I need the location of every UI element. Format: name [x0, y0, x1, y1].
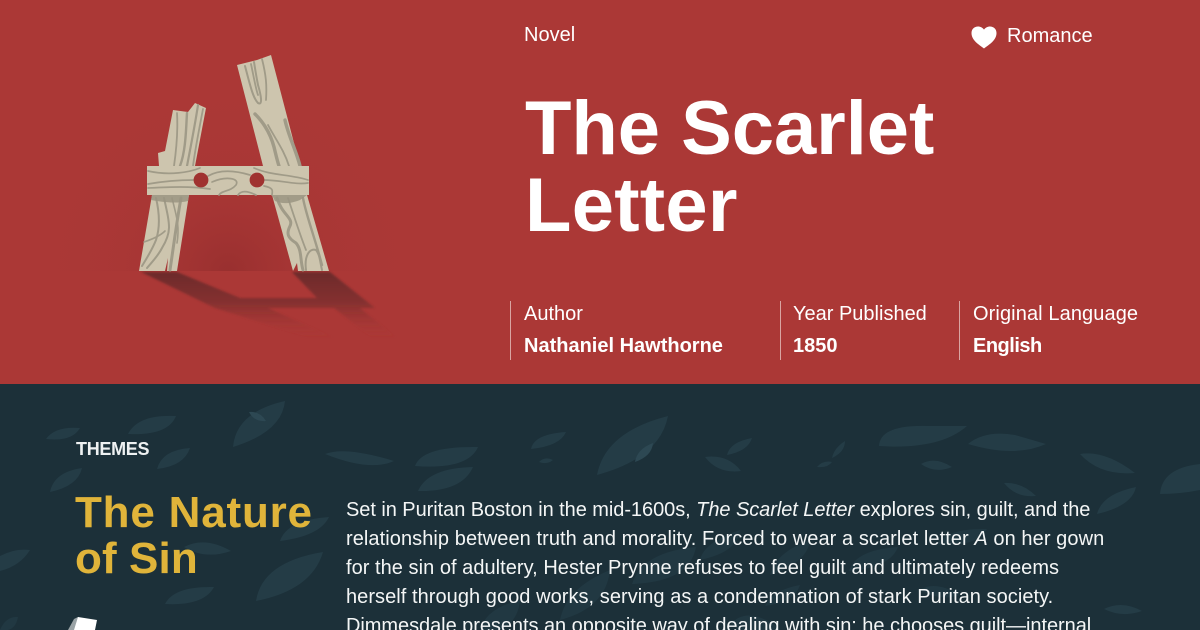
- body text: relationship between truth and morality. Forced to wear a scarlet letter A on her gown: [346, 528, 1104, 550]
- icon: partially visible white shape: [68, 617, 97, 630]
- title: Letter: [525, 163, 738, 248]
- illustration: wooden pillory shaped like the letter A: [139, 55, 374, 322]
- heading: The Nature of Sin: [75, 488, 313, 583]
- label: genre: Novel: [524, 24, 575, 46]
- meta: year published: Year Published: [793, 303, 927, 325]
- panel: header: [0, 0, 1200, 384]
- meta: original language: English: [973, 335, 1042, 357]
- label: themes: THEMES: [76, 439, 149, 459]
- heading: The Nature of Sin: The Nature: [75, 488, 313, 537]
- title: The Scarlet: [525, 86, 934, 171]
- heading: The Nature of Sin: of Sin: [75, 534, 198, 583]
- body text: [346, 499, 1104, 630]
- body text: for the sin of adultery, Hester Prynne refuses to feel guilt and ultimately redeems: [346, 557, 1059, 579]
- label: Romance: Romance: [1007, 25, 1093, 47]
- body text: Set in Puritan Boston in the mid-1600s, The Scarlet Letter explores sin, guilt, and the: [346, 499, 1090, 521]
- panel: themes: [0, 384, 1200, 630]
- meta: author: Author: [524, 303, 583, 325]
- crossbar with two holes: [147, 166, 309, 195]
- meta: year published: 1850: [793, 335, 838, 357]
- body text: herself through good works, serving as a condemnation of stark Puritan society.: [346, 586, 1053, 608]
- icon: heart: [972, 26, 996, 48]
- meta: year published: [793, 303, 927, 357]
- meta: author: Nathaniel Hawthorne: [524, 335, 723, 357]
- meta: original language: [973, 303, 1138, 357]
- title: [525, 86, 934, 248]
- background pattern: drifting leaves: [0, 401, 1200, 630]
- meta: original language: Original Language: [973, 303, 1138, 325]
- meta: author: [524, 303, 723, 357]
